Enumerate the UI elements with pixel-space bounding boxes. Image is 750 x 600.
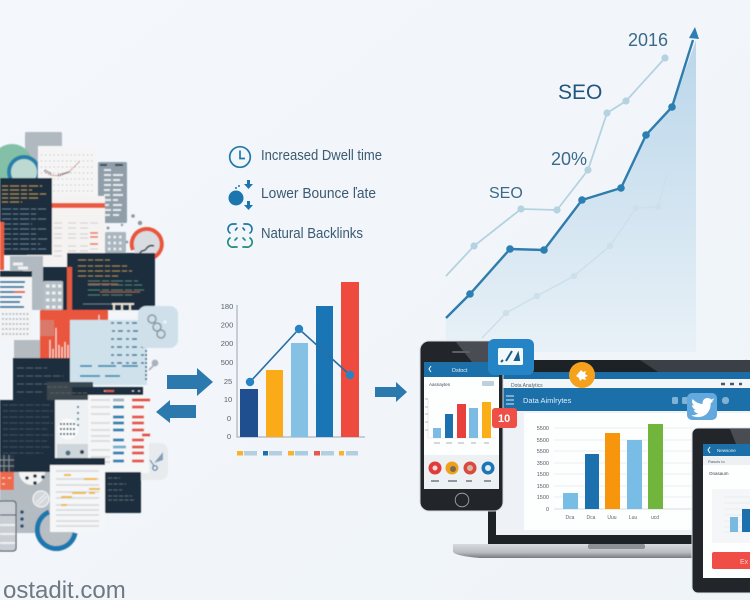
icon: bounce ball with arrows <box>228 180 253 210</box>
axis labels: 0 <box>227 432 231 441</box>
badge: orange <box>569 362 595 388</box>
tablet subheader: Rasuls to <box>708 459 725 464</box>
text: natural backlinks: Natural Backlinks <box>261 226 363 242</box>
blue data card <box>70 320 147 385</box>
blue donut <box>37 512 75 549</box>
app header: Data Aimlrytes <box>523 396 572 405</box>
gray card <box>25 132 62 172</box>
laptop screen <box>496 372 750 535</box>
phone subheader <box>429 381 494 387</box>
text: lower bounce rate: Lower Bounce ľate <box>261 186 376 202</box>
magnifier icon <box>149 360 158 370</box>
ticks above blue card <box>112 304 134 312</box>
gray block bottom left <box>0 472 50 533</box>
address bar <box>496 379 750 389</box>
card axis labels: 1500 <box>537 495 549 501</box>
dark code panel large <box>0 358 143 472</box>
tablet glare <box>730 429 750 444</box>
dark code panel bottom right <box>105 472 141 513</box>
phone header <box>424 362 499 377</box>
text: increased dwell time: Increased Dwell time <box>261 148 382 164</box>
striped coin icon <box>33 491 49 507</box>
tablet chart <box>712 489 750 543</box>
smartphone <box>420 341 503 511</box>
badge: blue chart <box>488 339 534 375</box>
laptop <box>453 360 750 558</box>
central bar chart <box>221 282 365 456</box>
laptop base <box>453 544 750 558</box>
card axis labels: 5500 <box>537 426 549 432</box>
red histogram card <box>40 310 108 360</box>
card bars <box>563 424 663 509</box>
red ring gauge <box>132 229 162 259</box>
dots column <box>20 510 24 528</box>
main trend line with arrow <box>446 27 699 318</box>
phone glare <box>456 342 502 362</box>
white ranked table <box>88 395 150 473</box>
table card with red band <box>27 196 105 266</box>
tablet subheader <box>703 456 750 476</box>
card axis labels: 5500 <box>537 438 549 444</box>
dark code panel top <box>0 178 52 255</box>
badge: red: 10 <box>498 413 510 425</box>
phone subheader: Aasnaytes <box>429 382 451 387</box>
tablet subheader: Onasaum <box>709 471 729 476</box>
axes <box>237 305 365 437</box>
teal ring <box>9 157 39 187</box>
phone header: Dstoct <box>452 368 468 374</box>
legend <box>237 451 358 456</box>
data collage <box>0 132 178 551</box>
card x labels: Luu <box>629 515 637 521</box>
phone bars <box>425 399 495 443</box>
card x labels: Dca <box>587 515 596 521</box>
analytics card <box>524 413 750 530</box>
outlined table <box>0 501 16 551</box>
overlay line <box>246 325 354 386</box>
dotted scatter card <box>38 146 97 198</box>
card axis labels: 5500 <box>537 449 549 455</box>
benefits list <box>228 147 382 247</box>
tablet header: Newsone <box>717 448 736 453</box>
phone screen <box>424 362 499 489</box>
axis labels: 25 <box>224 377 232 386</box>
arrow: chart to devices <box>375 382 407 402</box>
card x labels <box>566 515 659 521</box>
lid glare <box>640 360 750 378</box>
tablet body <box>692 428 750 593</box>
dark header bar <box>55 458 105 465</box>
small dots <box>106 214 142 243</box>
card x labels: Uuu <box>607 515 617 521</box>
tablet <box>692 428 750 593</box>
dotted half circle <box>19 472 45 485</box>
growth line chart <box>446 27 699 352</box>
green circle <box>0 144 33 186</box>
card axis labels: 1500 <box>537 472 549 478</box>
card axis labels: 1500 <box>537 484 549 490</box>
address bar: Dota Analytics <box>511 383 543 389</box>
axis labels: 10 <box>224 395 232 404</box>
axis labels: 200 <box>221 320 233 330</box>
card axis labels <box>537 426 549 513</box>
axis labels: 0 <box>227 414 231 423</box>
axis labels: 500 <box>221 358 233 367</box>
badge: twitter <box>687 393 717 420</box>
axis labels: 200 <box>221 339 233 348</box>
chart label: 20%: 20% <box>551 149 587 169</box>
chart label: SEO large: SEO <box>558 81 602 104</box>
card x labels: ucd <box>651 515 659 521</box>
icon: chain links <box>228 224 252 247</box>
chart label: SEO small: SEO <box>489 185 523 202</box>
card x labels: Dca <box>566 515 575 521</box>
pale blue rounded tile <box>138 306 178 348</box>
phone lower panel <box>424 455 499 489</box>
icon: clock <box>230 147 250 167</box>
phone home button <box>455 493 469 507</box>
tablet red button <box>712 552 750 569</box>
card axis labels: 0 <box>546 507 549 513</box>
tablet screen <box>703 444 750 578</box>
bars <box>240 282 359 437</box>
pale tile grid <box>43 281 63 310</box>
light trend line <box>446 54 669 276</box>
small side cards <box>14 340 46 360</box>
tablet header <box>703 444 750 456</box>
axis labels <box>221 302 233 441</box>
phone speaker <box>452 351 470 353</box>
slate list card <box>98 162 127 223</box>
chart label: 2016: 2016 <box>628 30 668 50</box>
white dotted globe card <box>55 400 90 458</box>
browser bar <box>496 372 750 380</box>
badge: red <box>492 408 517 428</box>
red side strip <box>0 222 4 270</box>
gray rounded tile with pin <box>132 443 168 480</box>
phone body <box>420 341 503 511</box>
laptop lid <box>488 360 750 545</box>
axis labels: 180 <box>221 302 233 311</box>
tablet red button: Ex <box>740 559 749 566</box>
chart area fill <box>446 40 696 352</box>
dark code panel middle <box>43 253 155 312</box>
arrow: chart to data <box>156 400 196 423</box>
card axis labels: 3500 <box>537 461 549 467</box>
gray mosaic <box>10 256 43 310</box>
dotted gray tile <box>105 232 126 253</box>
white table left <box>0 271 32 341</box>
grid icon block <box>0 455 14 490</box>
app header <box>496 388 750 411</box>
faint trend line <box>482 174 667 338</box>
yellow notes paper <box>50 465 105 532</box>
arrow: data to chart <box>167 368 213 396</box>
